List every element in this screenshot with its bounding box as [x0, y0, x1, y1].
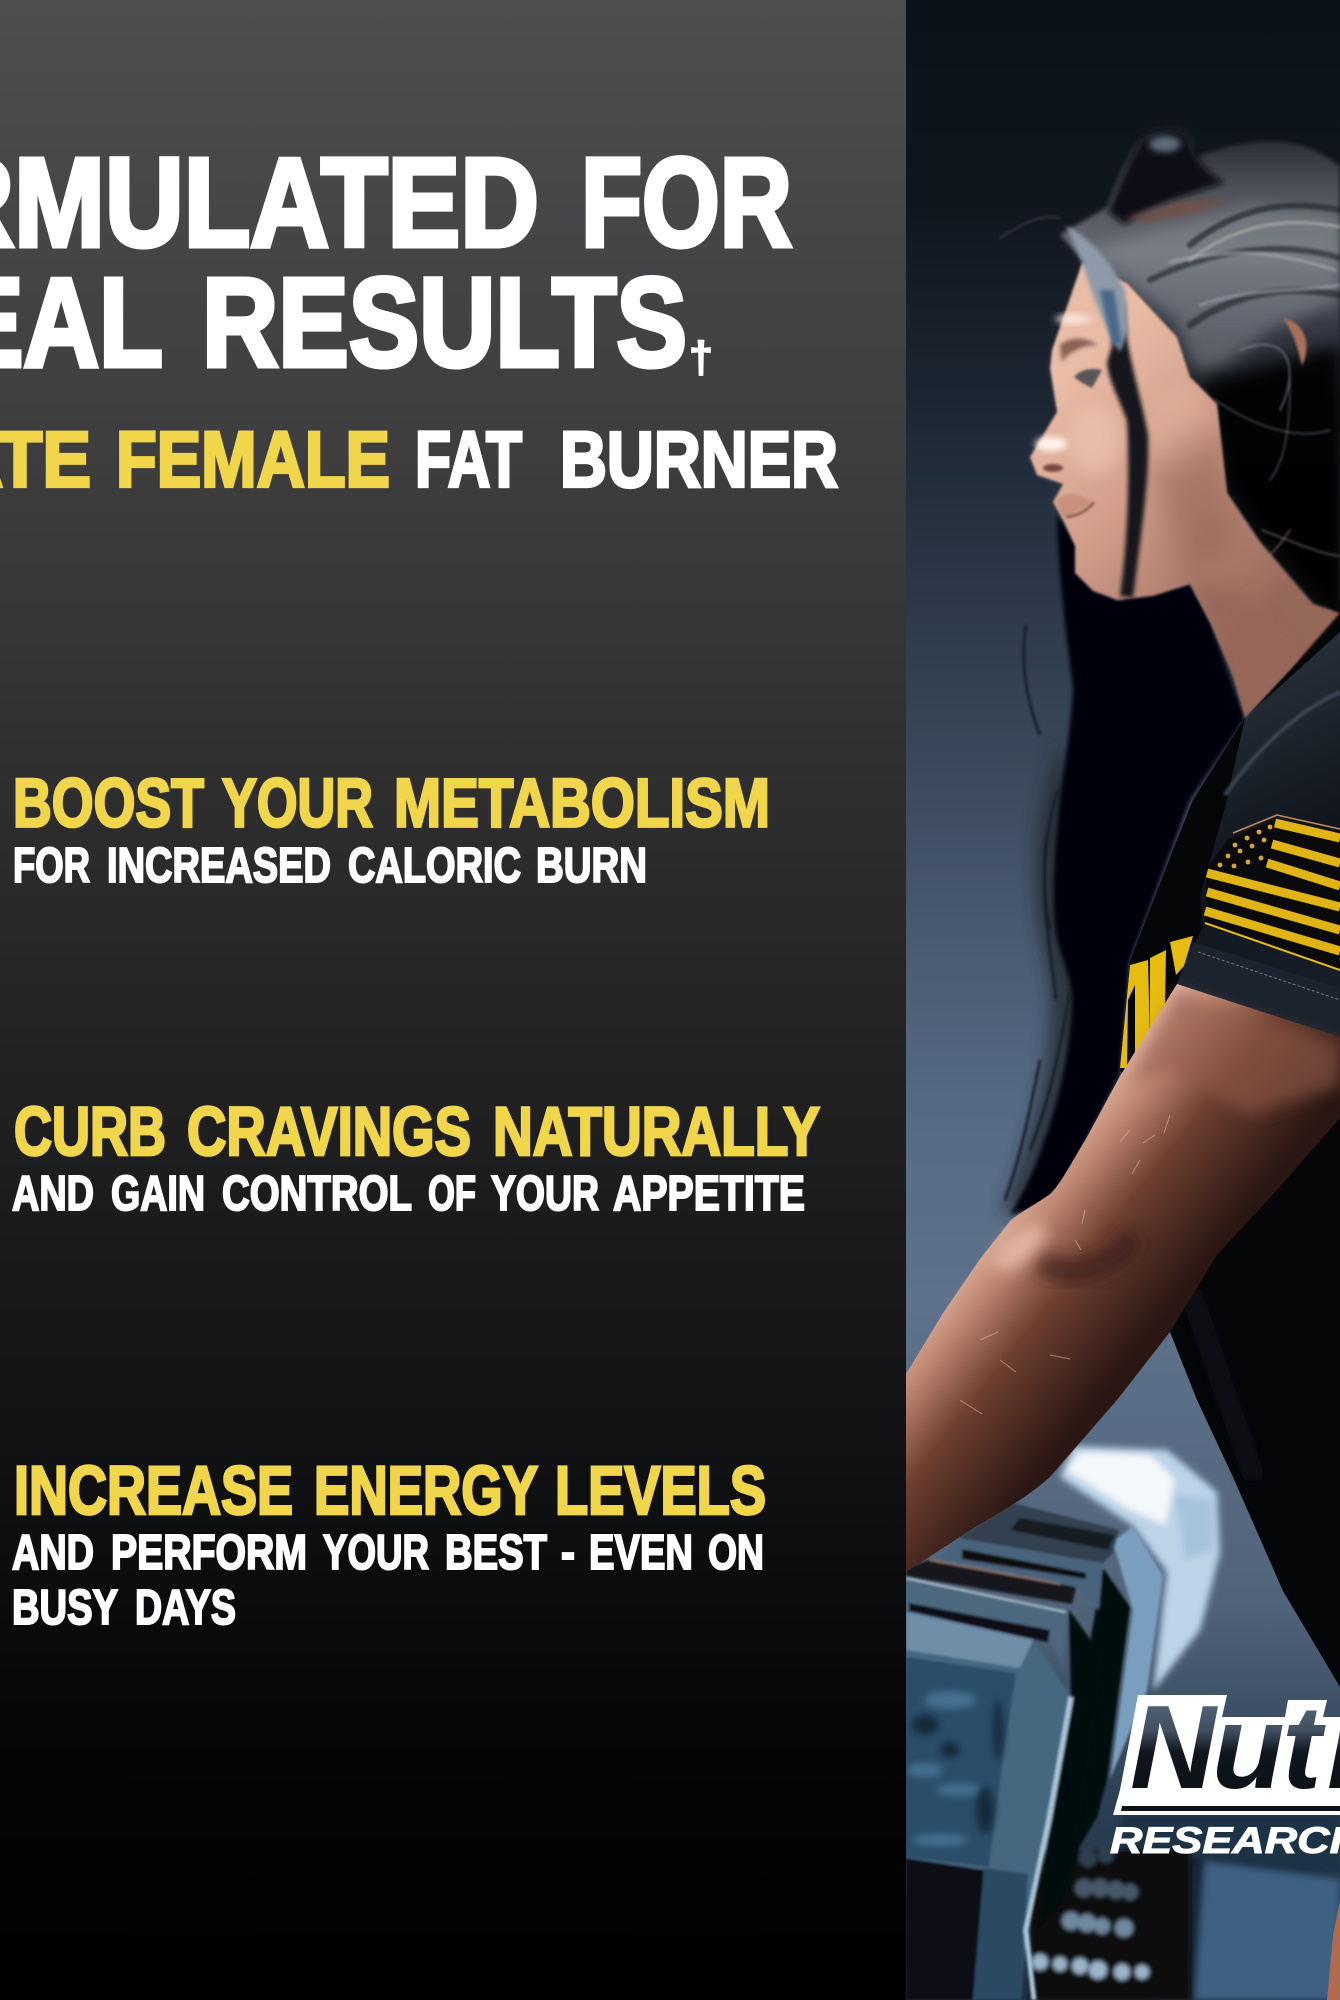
logo plate: [1113, 1695, 1340, 1815]
benefit heading: YOUR: [222, 764, 373, 842]
logo underline gap: [1121, 1806, 1340, 1811]
benefit heading: CURB: [14, 1093, 166, 1170]
subtitle: [0, 414, 838, 504]
blurred rear dumbbell: [1060, 1446, 1220, 1691]
benefit description: BEST: [445, 1526, 547, 1580]
middle dumbbell plates: [906, 1503, 1163, 1880]
benefit description: CALORIC: [348, 839, 521, 893]
benefit heading: NATURALLY: [493, 1093, 820, 1170]
benefit description: YOUR: [323, 1526, 429, 1580]
benefit description: AND: [12, 1167, 94, 1221]
hair strands: [999, 201, 1340, 558]
benefit description: [12, 1167, 805, 1221]
head: hair top: [1060, 126, 1340, 613]
benefit heading: LEVELS: [555, 1452, 766, 1529]
icon: american flag patch: [1205, 815, 1340, 970]
title: FOR: [581, 132, 792, 273]
subtitle: FEMALE: [116, 414, 390, 504]
benefit description: APPETITE: [613, 1167, 805, 1221]
benefit: boost metabolism: [13, 764, 770, 893]
benefit description: FOR: [13, 839, 90, 893]
arm: [906, 984, 1340, 1572]
benefit description: EVEN: [589, 1526, 693, 1580]
black t-shirt body: [1120, 640, 1340, 1687]
benefit description: AND: [12, 1526, 94, 1580]
logo tagline: RESEARCH: [1110, 1820, 1340, 1861]
photo: woman at dumbbell rack: [906, 0, 1340, 2000]
yellow shirt print: [1120, 936, 1193, 1068]
panel: dark gradient text panel: [0, 0, 906, 2000]
benefit heading: INCREASE: [14, 1452, 293, 1529]
benefit: increase energy: [12, 1452, 766, 1635]
benefit heading: [14, 1093, 820, 1170]
benefit description: BUSY: [12, 1581, 118, 1635]
title: [0, 132, 792, 393]
benefit heading: METABOLISM: [394, 764, 770, 842]
subtitle: BURNER: [560, 414, 838, 504]
benefit description: ON: [708, 1526, 764, 1580]
front dumbbell: [906, 1578, 1103, 2000]
rear blue equipment block: [1040, 1815, 1340, 2000]
subtitle: FAT: [415, 414, 522, 504]
hair strand across face: [1066, 226, 1148, 598]
benefit description: BURN: [536, 839, 647, 893]
title: †: [689, 333, 713, 382]
shirt lower fold: [1190, 1290, 1255, 1480]
t-shirt sleeve: [1177, 600, 1340, 1037]
benefit heading: CRAVINGS: [187, 1093, 471, 1170]
benefit description: INCREASED: [107, 839, 331, 893]
benefit description: GAIN: [111, 1167, 205, 1221]
benefit heading: ENERGY: [314, 1452, 538, 1529]
benefit description: CONTROL: [222, 1167, 412, 1221]
benefit description: OF: [428, 1167, 476, 1221]
benefit heading: BOOST: [13, 764, 204, 842]
benefit description: YOUR: [491, 1167, 599, 1221]
benefit description: [13, 839, 647, 893]
benefit heading: [14, 1452, 766, 1529]
benefit description: -: [561, 1526, 575, 1580]
photo backdrop: [906, 0, 1340, 2000]
ear: [1283, 318, 1306, 366]
long dark hair: [1000, 515, 1245, 1215]
hair bun shading: [1090, 130, 1340, 620]
skin patch lower right: [1327, 1900, 1340, 2000]
benefit description: PERFORM: [111, 1526, 307, 1580]
benefit description: DAYS: [135, 1581, 236, 1635]
logo: Nutrex Research: [1110, 1695, 1340, 1854]
benefit heading: [13, 764, 770, 842]
benefit description: [12, 1526, 764, 1635]
face and neck: [1030, 263, 1340, 718]
title: RESULTS: [202, 252, 687, 393]
benefit: curb cravings: [12, 1093, 820, 1221]
rack bolts: [1030, 1847, 1190, 2000]
